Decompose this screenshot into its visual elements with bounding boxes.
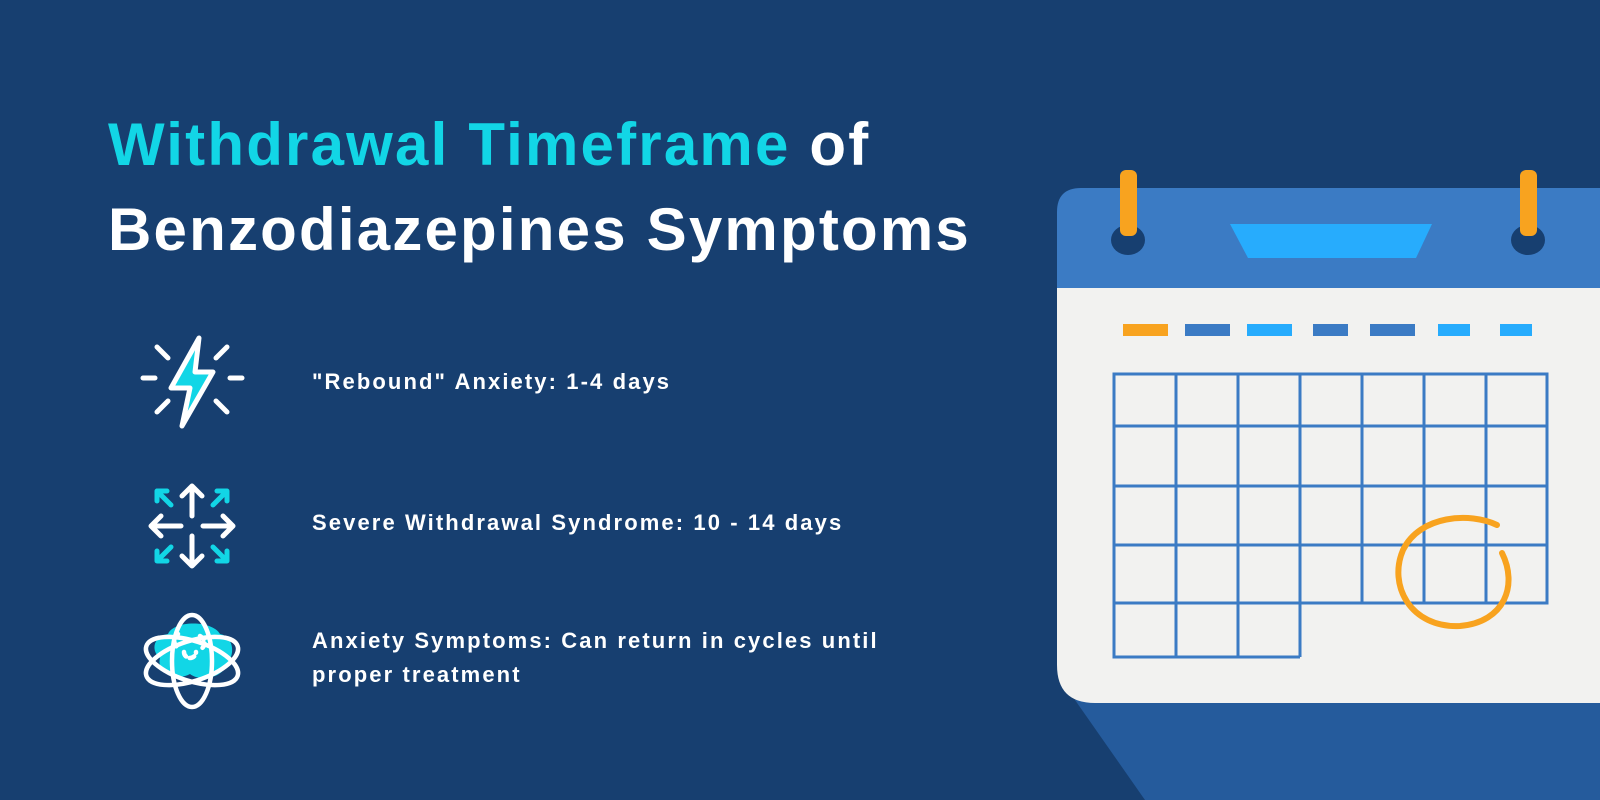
orange circle marker [1398, 518, 1509, 626]
item 3 text: proper treatment [312, 662, 522, 687]
title: Benzodiazepines Symptoms [108, 196, 971, 263]
calendar shadow [1075, 700, 1600, 800]
calendar body [1057, 288, 1600, 703]
weekday dashes [1123, 324, 1532, 336]
calendar header [1057, 188, 1600, 290]
title: Withdrawal Timeframe of [108, 111, 870, 178]
icon: brain atom [144, 612, 240, 710]
item 3 text: Anxiety Symptoms: Can return in cycles until [312, 628, 879, 653]
calendar grid [1114, 374, 1547, 657]
month label trapezoid [1230, 224, 1432, 258]
icon: lightning bolt [140, 336, 244, 428]
title [108, 111, 971, 263]
item 2 text: Severe Withdrawal Syndrome: 10 - 14 days [312, 510, 843, 535]
item 1 text: "Rebound" Anxiety: 1-4 days [312, 369, 671, 394]
item 3 text [312, 628, 879, 687]
icon: expanding arrows [148, 484, 236, 568]
ring holes and pins [1111, 170, 1545, 255]
calendar illustration [1057, 170, 1600, 800]
